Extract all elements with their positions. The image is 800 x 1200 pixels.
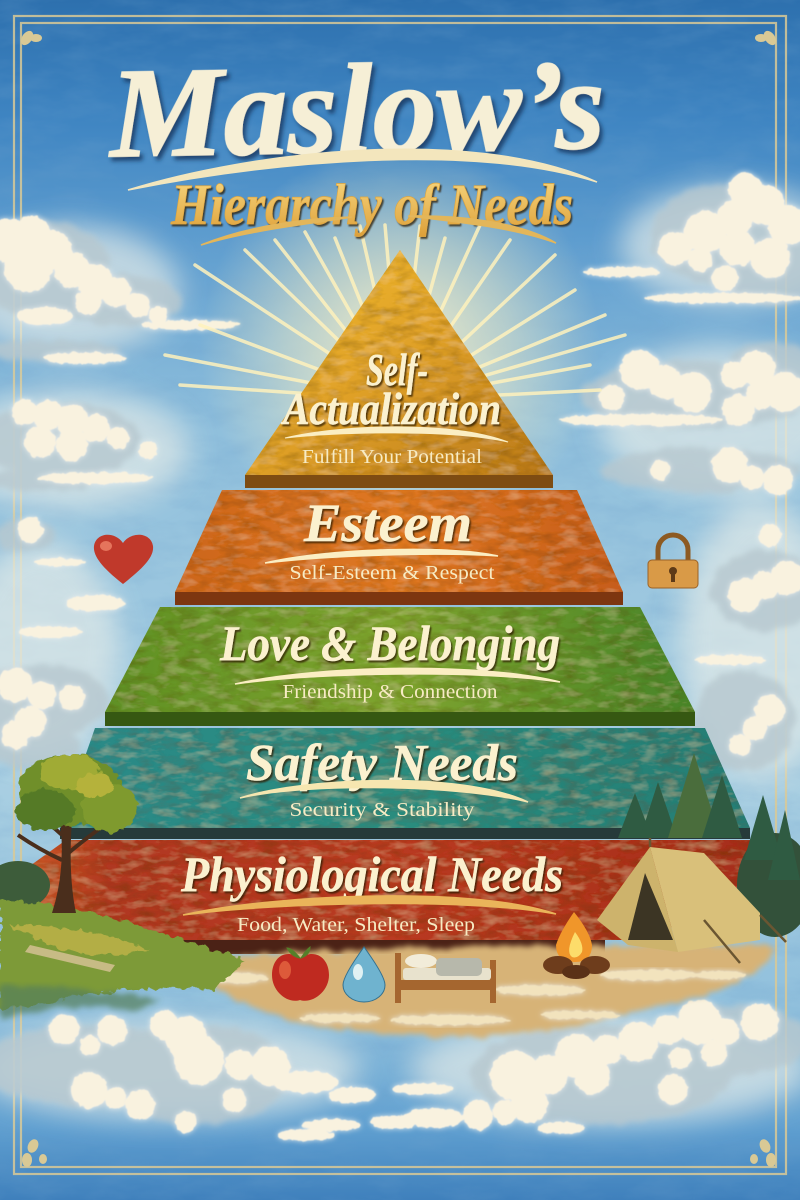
clouds: middle right	[558, 350, 800, 756]
tier: love and belonging: Love & Belonging	[219, 615, 560, 671]
sun rays	[165, 145, 625, 545]
tier: self-actualization: Fulfill Your Potential	[302, 446, 482, 468]
icon: apple	[272, 947, 329, 1001]
icon: tree	[15, 754, 138, 913]
pyramid	[20, 250, 765, 954]
ground	[0, 833, 800, 1037]
title lower swoosh	[201, 216, 556, 245]
tier: love and belonging	[105, 607, 695, 726]
icon: campfire	[543, 912, 610, 979]
clouds: shadow layer	[0, 185, 800, 1125]
tier: self-actualization: Self-	[366, 344, 428, 395]
clouds: middle left	[0, 399, 157, 749]
title: Hierarchy of Needs: Hierarchy of Needs	[170, 172, 573, 237]
clouds: bottom band	[49, 1000, 779, 1141]
dark bushes	[737, 833, 800, 937]
icon: pine trees	[618, 753, 800, 880]
tier: physiological needs: Food, Water, Shelter, Sleep	[237, 914, 475, 936]
sand highlights	[212, 970, 745, 1025]
tier: safety needs	[60, 728, 750, 839]
tier: esteem: Esteem	[303, 493, 472, 553]
icon: tent	[597, 838, 786, 963]
clouds: upper left	[0, 216, 240, 364]
tier: esteem	[175, 490, 623, 605]
tier: physiological needs	[20, 840, 765, 954]
tier: self-actualization: Actualization	[280, 383, 501, 434]
title	[107, 34, 606, 245]
icon: bed	[395, 953, 496, 1003]
title swoosh	[128, 149, 597, 190]
icon: water drop	[343, 947, 385, 1002]
tier: safety needs: Security & Stability	[290, 799, 474, 821]
grassy hill	[0, 900, 246, 1010]
icon: heart	[94, 535, 153, 584]
tier: esteem: Self-Esteem & Respect	[290, 562, 495, 584]
tier: love and belonging: Friendship & Connection	[282, 681, 498, 703]
sun glow	[200, 145, 600, 545]
title: Maslow's: Maslow’s	[107, 34, 606, 184]
sandy ground	[184, 945, 775, 1037]
cloud wash haze	[0, 185, 800, 1125]
clouds: upper right	[584, 173, 800, 303]
tier: safety needs: Safety Needs	[246, 735, 518, 792]
icon: padlock	[648, 535, 698, 588]
tier: physiological needs: Physiological Needs	[180, 846, 563, 902]
tier: self-actualization	[245, 250, 553, 488]
